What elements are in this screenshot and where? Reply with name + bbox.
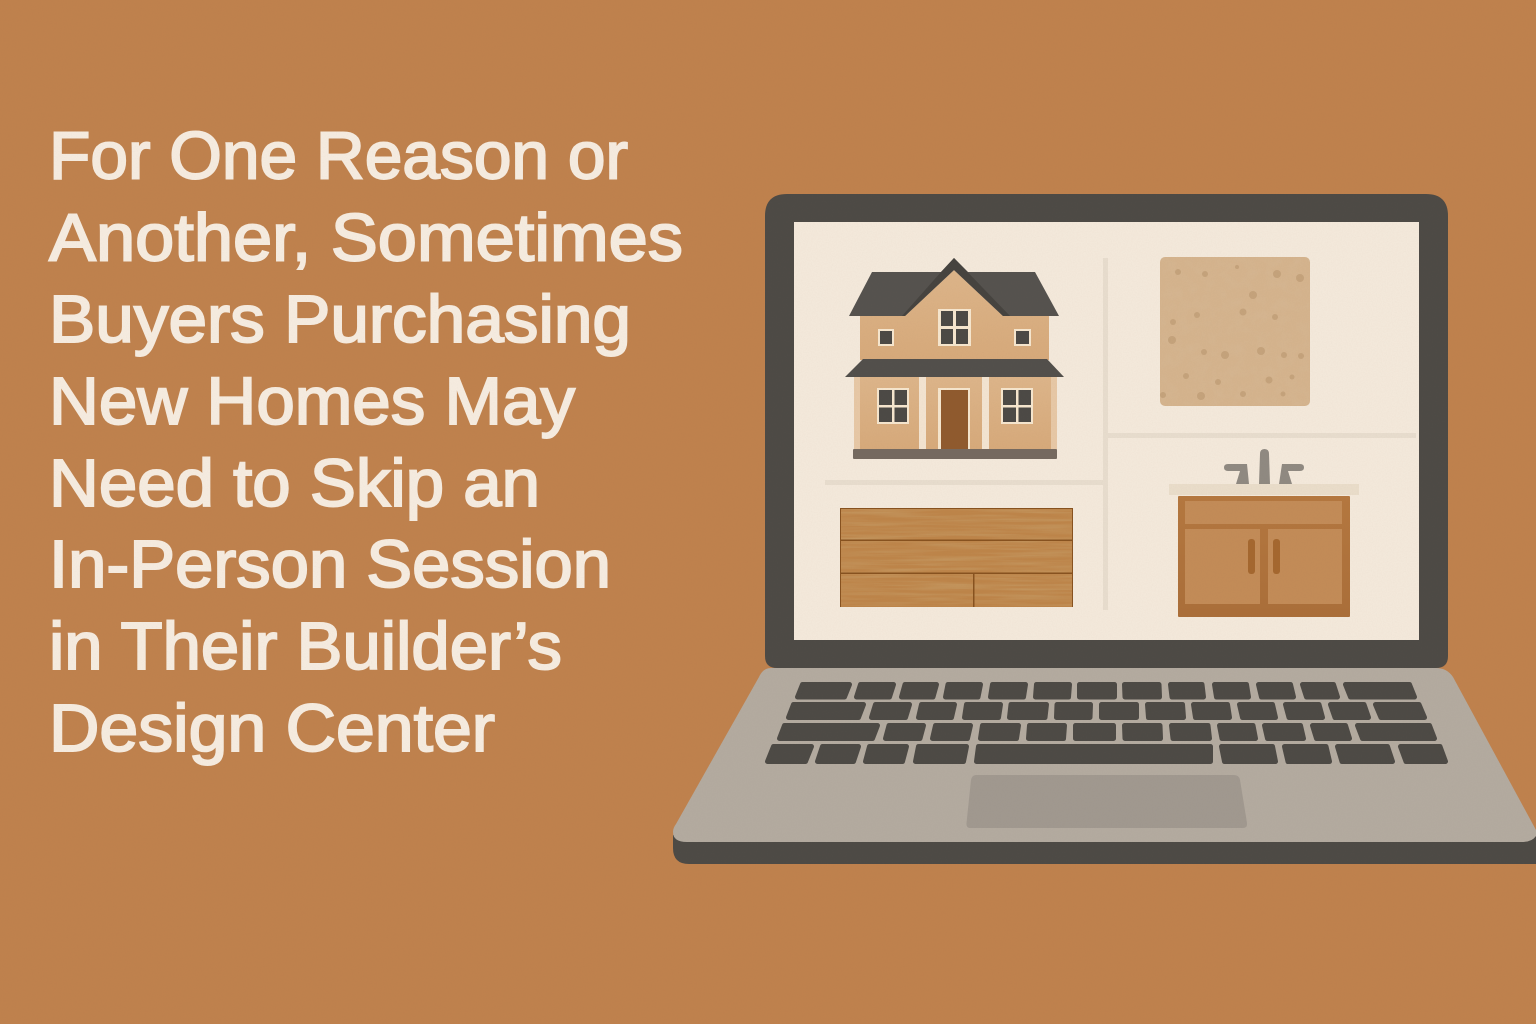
lower wall <box>854 377 1057 450</box>
cabinet <box>1178 496 1350 617</box>
window: lower right <box>1001 388 1033 424</box>
handles <box>1248 539 1280 574</box>
laptop deck <box>673 668 1536 842</box>
title: in Their Builder’s <box>49 609 562 684</box>
title: Buyers Purchasing <box>49 282 631 357</box>
drawer <box>1185 501 1342 524</box>
porch roof <box>845 359 1064 377</box>
title <box>49 118 683 766</box>
icon: bathroom vanity <box>1169 449 1359 617</box>
title: Another, Sometimes <box>49 200 683 276</box>
door <box>938 388 970 450</box>
title: New Homes May <box>49 364 576 439</box>
window: upper small left <box>878 329 894 346</box>
icon: stone sample <box>1160 257 1310 406</box>
window: upper centre <box>938 309 971 346</box>
window: lower left <box>877 388 909 424</box>
title: Design Center <box>49 691 495 766</box>
laptop <box>673 194 1536 864</box>
icon: wood flooring <box>840 508 1073 607</box>
gable trim <box>902 258 1010 316</box>
faucet <box>1224 449 1304 484</box>
upper wall <box>860 270 1049 360</box>
window: upper small right <box>1014 329 1031 346</box>
pillars <box>919 377 926 450</box>
icon: house <box>845 258 1064 459</box>
title: For One Reason or <box>49 118 628 194</box>
keyboard <box>768 684 1446 762</box>
trackpad <box>966 775 1247 828</box>
foundation <box>853 449 1057 459</box>
left door <box>1185 529 1260 604</box>
title: In-Person Session <box>49 527 611 602</box>
laptop base edge <box>673 835 1536 864</box>
laptop lid <box>765 194 1448 668</box>
right door <box>1268 529 1342 604</box>
countertop <box>1169 484 1359 495</box>
main roof <box>849 258 1059 316</box>
screen <box>794 222 1419 640</box>
title: Need to Skip an <box>49 446 540 521</box>
